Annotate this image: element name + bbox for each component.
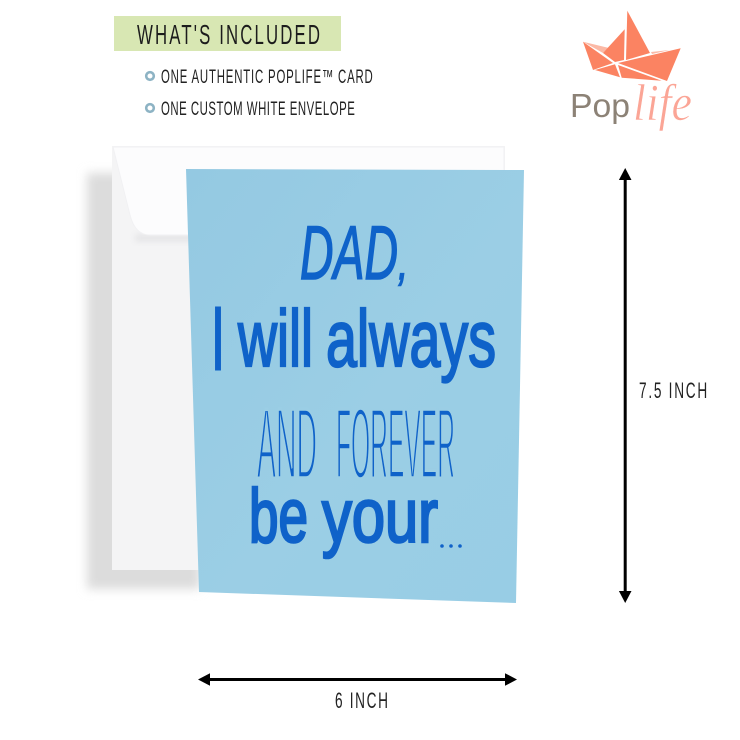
card face — [186, 169, 524, 603]
line: AND FOREVER: AND — [257, 388, 317, 500]
arrow: width dimension — [198, 673, 517, 686]
ellipsis — [440, 544, 462, 548]
line: DAD: , — [398, 234, 408, 290]
flap shadow — [135, 234, 195, 242]
label: 6 inch: 6 INCH — [335, 688, 388, 713]
greeting card — [186, 169, 524, 603]
line: be your — [249, 474, 438, 559]
line: DAD: DAD — [300, 211, 398, 296]
wordmark: Pop — [570, 87, 630, 124]
logo: Poplife — [570, 11, 692, 132]
wordmark — [570, 75, 692, 132]
line: DAD — [300, 211, 408, 296]
envelope shadow — [87, 173, 200, 589]
card message — [214, 211, 496, 559]
envelope flap — [113, 147, 504, 235]
wordmark: life — [633, 75, 692, 132]
item: envelope: ONE CUSTOM WHITE ENVELOPE — [161, 99, 355, 120]
line: I will always: will — [237, 294, 313, 383]
item: card: ONE AUTHENTIC POPLIFE™ CARD — [161, 67, 373, 88]
line: I will always: I — [214, 294, 222, 383]
line: be your: your — [322, 474, 438, 559]
line: be your: be — [249, 474, 308, 559]
envelope body — [112, 146, 505, 570]
line: I will always: always — [326, 294, 496, 383]
arrow: height dimension — [619, 168, 632, 603]
label: 7.5 inch: 7.5 INCH — [639, 378, 707, 403]
list: included items — [146, 67, 373, 120]
heading: what's included: WHAT'S INCLUDED — [137, 19, 320, 50]
envelope with shadow — [87, 146, 505, 589]
line: I will always — [214, 294, 496, 383]
icon: paper boat — [583, 11, 681, 81]
